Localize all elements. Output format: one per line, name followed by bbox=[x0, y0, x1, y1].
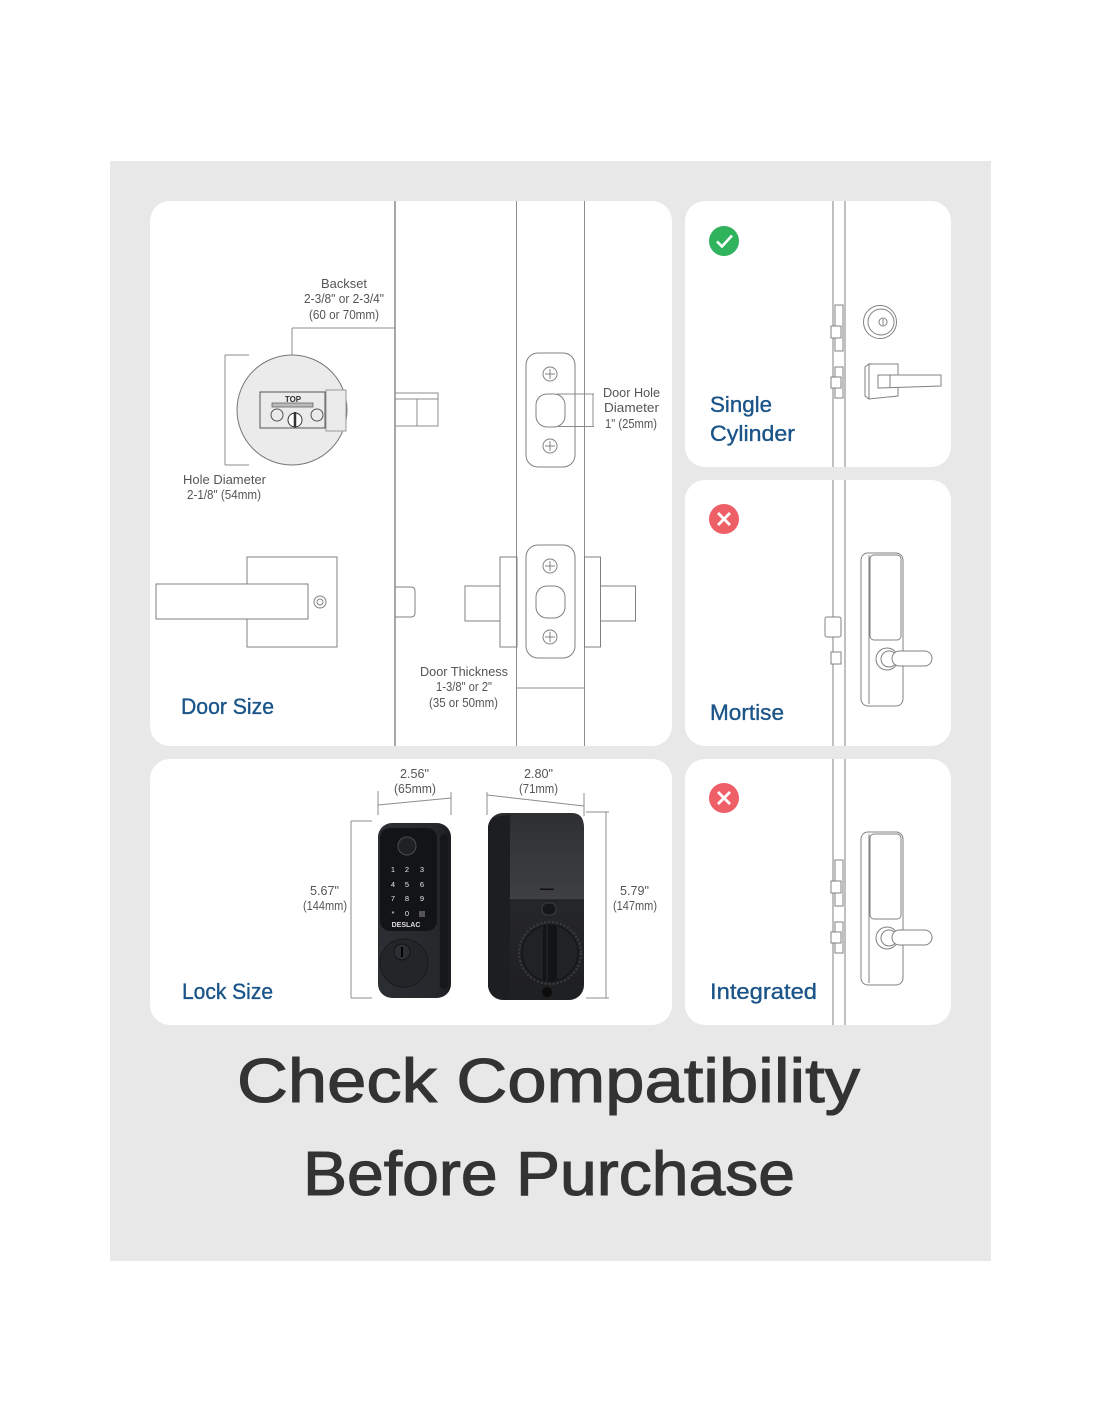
panel: single cylinder bbox=[685, 201, 951, 467]
front lever handle bbox=[156, 557, 337, 647]
rear lock width dimension bbox=[487, 767, 584, 816]
panel background: integrated bbox=[685, 759, 951, 1025]
smart lock front view bbox=[378, 823, 451, 998]
backset dimension: Backset bbox=[321, 277, 368, 291]
lever handle bbox=[865, 364, 941, 399]
door hole diameter dimension: 1" (25mm) bbox=[605, 417, 657, 431]
smart lock rear view bbox=[488, 813, 584, 1000]
backset dimension: 2-3/8" or 2-3/4" bbox=[304, 292, 384, 306]
keypad digits: 5 bbox=[405, 880, 409, 889]
panel: door size bbox=[150, 201, 672, 746]
door hole plate bbox=[526, 353, 575, 467]
title bbox=[237, 1047, 860, 1209]
integrated lock body bbox=[861, 832, 932, 985]
heading: lock size: Lock Size bbox=[182, 979, 273, 1004]
hole cutaway diagram: TOP bbox=[285, 395, 302, 404]
rear lock height dimension bbox=[586, 812, 657, 998]
rear lock height dimension: 5.79" bbox=[620, 884, 649, 898]
panel: mortise bbox=[685, 480, 951, 746]
rear lock height dimension: (147mm) bbox=[613, 899, 657, 913]
title: Check Compatibility bbox=[237, 1047, 860, 1116]
deadbolt cylinder bbox=[864, 306, 896, 338]
front lock height dimension: (144mm) bbox=[303, 899, 347, 913]
door thickness dimension: (35 or 50mm) bbox=[429, 696, 498, 710]
door edge lines bbox=[395, 201, 584, 746]
keypad digits: 4 bbox=[391, 880, 395, 889]
keypad digits: 2 bbox=[405, 865, 409, 874]
door thickness dimension: Door Thickness bbox=[420, 665, 508, 679]
hole diameter dimension: 2-1/8" (54mm) bbox=[187, 488, 261, 502]
backset dimension bbox=[292, 277, 395, 355]
panel background: single cylinder bbox=[685, 201, 951, 467]
icon: green check bbox=[709, 226, 739, 256]
side latch small bbox=[395, 587, 415, 617]
front lock height dimension bbox=[303, 821, 372, 998]
door hole diameter dimension: Diameter bbox=[604, 401, 659, 415]
keypad digits: * bbox=[392, 909, 395, 918]
heading: integrated: Integrated bbox=[710, 979, 817, 1004]
keypad digits: 9 bbox=[420, 894, 424, 903]
rear lock width dimension: (71mm) bbox=[519, 782, 558, 796]
keypad digits: 6 bbox=[420, 880, 424, 889]
panel: lock size bbox=[150, 759, 672, 1025]
title: Before Purchase bbox=[303, 1140, 795, 1209]
keypad digits: 8 bbox=[405, 894, 409, 903]
grey background panel bbox=[110, 161, 991, 1261]
rear lock width dimension: 2.80" bbox=[524, 767, 553, 781]
front lock width dimension: 2.56" bbox=[400, 767, 429, 781]
door section with mortise bolts bbox=[825, 480, 845, 746]
keypad digits: 3 bbox=[420, 865, 424, 874]
door hole diameter dimension: Door Hole bbox=[603, 386, 660, 400]
heading: single cylinder: Cylinder bbox=[710, 421, 795, 446]
keypad digits: 7 bbox=[391, 894, 395, 903]
heading: single cylinder bbox=[710, 392, 795, 446]
side latch profile bbox=[395, 393, 438, 426]
front lock width dimension: (65mm) bbox=[394, 782, 436, 796]
door thickness dimension bbox=[420, 665, 584, 710]
keypad digits: 0 bbox=[405, 909, 409, 918]
door hole diameter dimension bbox=[557, 386, 660, 431]
edge-on lever and latch plate bbox=[465, 545, 636, 658]
door thickness dimension: 1-3/8" or 2" bbox=[436, 680, 492, 694]
door section with latch plates bbox=[831, 759, 845, 1025]
panel background: lock size bbox=[150, 759, 672, 1025]
backset dimension: (60 or 70mm) bbox=[309, 308, 379, 322]
keypad digits: 1 bbox=[391, 865, 395, 874]
icon: red cross bbox=[709, 504, 739, 534]
door section with latch plates bbox=[831, 201, 845, 467]
front lock width dimension bbox=[378, 767, 451, 815]
hole cutaway diagram bbox=[237, 355, 347, 465]
panel background: door size bbox=[150, 201, 672, 746]
heading: mortise: Mortise bbox=[710, 700, 784, 725]
integrated lock body bbox=[861, 553, 932, 706]
panel background: mortise bbox=[685, 480, 951, 746]
panel: integrated bbox=[685, 759, 951, 1025]
smart lock front view: DESLAC bbox=[392, 922, 420, 929]
hole diameter dimension: Hole Diameter bbox=[183, 473, 266, 487]
icon: red cross bbox=[709, 783, 739, 813]
hole diameter dimension bbox=[183, 355, 266, 502]
front lock height dimension: 5.67" bbox=[310, 884, 339, 898]
heading: single cylinder: Single bbox=[710, 392, 772, 417]
keypad digits bbox=[391, 865, 425, 918]
heading: door size: Door Size bbox=[181, 694, 274, 719]
